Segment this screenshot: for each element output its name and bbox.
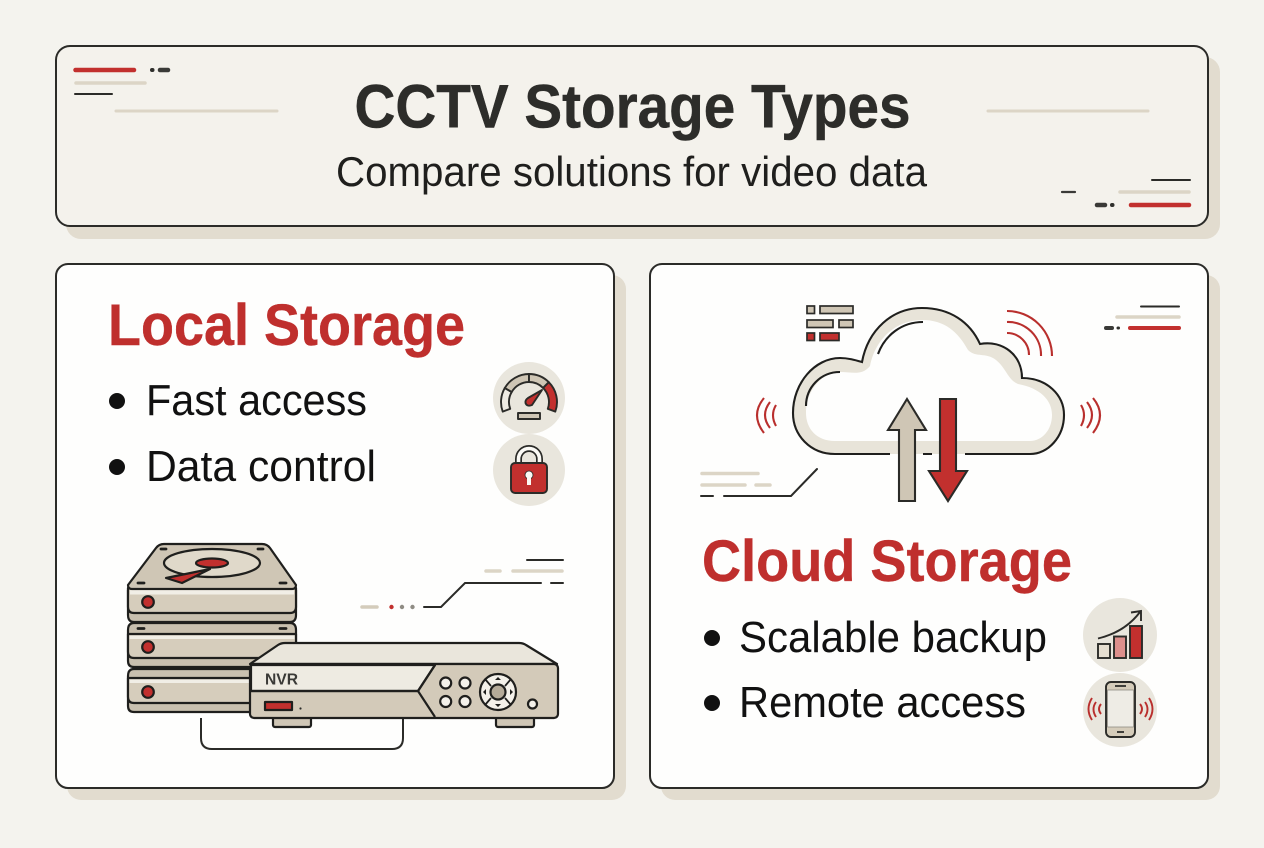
illustration: hard drive stack and NVR xyxy=(128,544,558,749)
illustration: cloud xyxy=(793,308,1064,454)
panel: header xyxy=(56,46,1220,239)
data blocks xyxy=(807,306,853,340)
list: local storage benefits xyxy=(109,377,376,491)
icon: padlock xyxy=(493,434,565,506)
list: local storage benefits: Fast access xyxy=(146,377,367,425)
NVR recorder: NVR xyxy=(265,672,298,688)
header accent lines, top left xyxy=(75,70,277,111)
cable xyxy=(201,718,403,749)
icon: speed gauge xyxy=(493,362,565,434)
title: CCTV Storage Types xyxy=(354,72,910,140)
NVR recorder xyxy=(250,643,558,727)
list: cloud storage benefits: Scalable backup xyxy=(739,614,1047,662)
arrow: download xyxy=(929,399,967,501)
icon: signal waves around cloud xyxy=(757,311,1100,433)
panel: local storage xyxy=(56,264,626,800)
list: cloud storage benefits xyxy=(704,614,1047,727)
hard drive 1 xyxy=(128,544,296,622)
heading: local storage: Local Storage xyxy=(108,293,465,358)
icon: smartphone with signal xyxy=(1083,673,1157,747)
cloud accent lines xyxy=(701,306,1179,496)
hard drive 2 xyxy=(128,623,296,667)
local storage accent lines xyxy=(362,560,563,609)
list: local storage benefits: Data control xyxy=(146,443,376,491)
header accent lines, right xyxy=(988,111,1190,205)
arrow: upload xyxy=(888,399,926,501)
subtitle: Compare solutions for video data xyxy=(336,148,928,195)
list: cloud storage benefits: Remote access xyxy=(739,679,1026,727)
icon: growth chart xyxy=(1083,598,1157,672)
hard drive 3 xyxy=(128,669,296,712)
panel: cloud storage xyxy=(650,264,1220,800)
heading: cloud storage: Cloud Storage xyxy=(702,529,1072,594)
